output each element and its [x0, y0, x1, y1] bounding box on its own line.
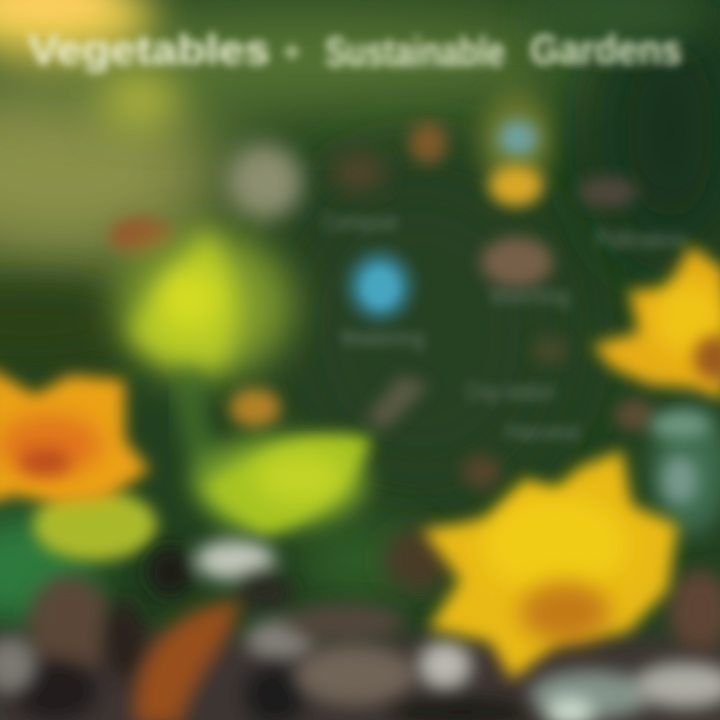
icon: red leaf [110, 218, 174, 254]
flower: right upper yellow [592, 245, 720, 400]
flower: large yellow bottom right [422, 450, 678, 680]
stem [189, 370, 240, 530]
sunlight glow [0, 0, 180, 132]
icon: small orange marker [409, 122, 447, 164]
icon: pale flower [227, 144, 303, 220]
text block: blurred labels: Pollinators [595, 224, 687, 254]
text block: blurred labels: Crop rotation [465, 376, 555, 406]
icon: hanging lantern [480, 90, 552, 206]
plant: right pale leaves [650, 405, 720, 535]
text block: blurred labels: Harvest [505, 419, 580, 446]
flower: left orange [0, 365, 157, 561]
title: Vegetables [28, 26, 270, 73]
title: Gardens [530, 26, 682, 73]
icon: brown marker [330, 152, 386, 192]
title: Sustainable [325, 28, 505, 75]
text block: blurred labels: Watering [340, 325, 425, 352]
plant: yellow-green lower leaf [192, 434, 372, 535]
title [28, 26, 682, 75]
text block: blurred labels [322, 209, 687, 446]
text block: blurred labels: Compost [322, 209, 397, 236]
icon: brown markers [229, 177, 655, 592]
title: + [283, 36, 301, 69]
icon: blue water drop [349, 253, 411, 319]
text block: blurred labels: Mulching [490, 283, 570, 310]
icon: tan seeds [481, 237, 553, 287]
plant: yellow-green upper leaf [117, 230, 293, 380]
ground: soil and pebbles [0, 540, 720, 720]
